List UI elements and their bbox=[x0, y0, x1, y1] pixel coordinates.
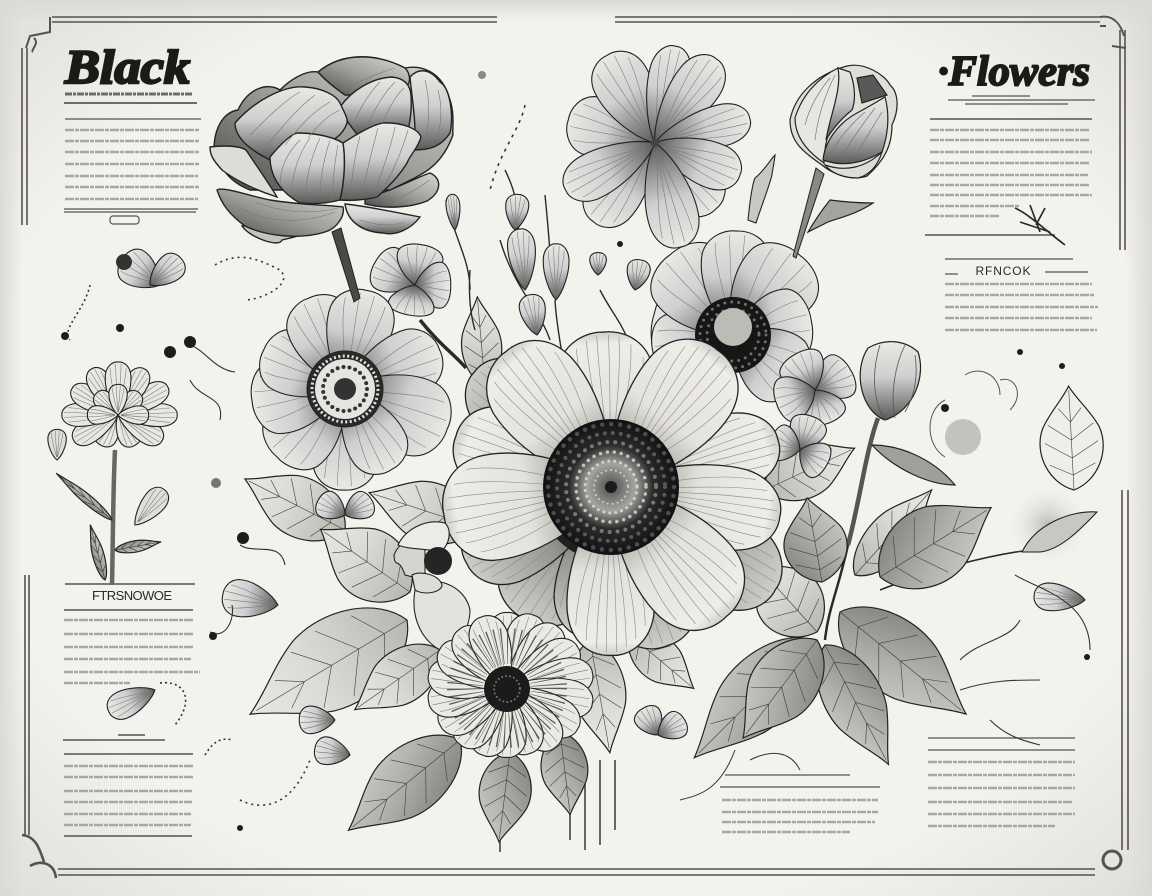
bottom hanging leaf 1 bbox=[473, 749, 536, 845]
tulip left petal bbox=[795, 68, 840, 163]
seed head bbox=[543, 419, 679, 555]
right column: secondary text block bbox=[945, 259, 1098, 330]
back petals bbox=[447, 340, 800, 661]
flower: anemone left bbox=[247, 283, 462, 490]
tulip middle petal bbox=[826, 68, 854, 140]
corner ornament: bottom right bbox=[1103, 851, 1121, 869]
small bloom big lower petal bbox=[414, 581, 470, 652]
bud: left middle bbox=[220, 577, 281, 623]
round seed sketch bbox=[945, 419, 981, 455]
bottom hanging leaf 2 bbox=[537, 729, 593, 817]
flower: upper right daisy bbox=[638, 229, 832, 412]
bud: pod on text bbox=[103, 677, 161, 724]
tulip curl bbox=[825, 152, 882, 178]
peony upper right petal bbox=[340, 77, 411, 134]
flower: main central bloom bbox=[435, 320, 800, 661]
text lines bbox=[64, 766, 193, 825]
bud: stray top centre bbox=[504, 193, 530, 231]
dotted flight paths and doodles bbox=[68, 105, 1090, 805]
peony front left petal bbox=[270, 133, 344, 204]
peony lower petal sliver bbox=[242, 220, 330, 243]
middle pale leaf bbox=[360, 464, 487, 556]
cluster leaf right bbox=[817, 584, 989, 743]
small caption box bbox=[110, 216, 139, 224]
tulip dark throat bbox=[857, 75, 887, 103]
cluster pale up-left bbox=[730, 540, 842, 654]
bud: white flowers bbox=[631, 702, 670, 742]
peony veins bbox=[240, 68, 441, 225]
left lower pale leaf bbox=[340, 628, 455, 731]
small bloom lower petal bbox=[412, 573, 442, 593]
peony front right petal bbox=[340, 123, 421, 200]
peony back mass bbox=[214, 57, 453, 190]
bud: left top bbox=[112, 243, 171, 300]
peony lower-left outer petal bbox=[210, 146, 277, 197]
leaf behind flower bbox=[457, 295, 505, 387]
pale back foliage bbox=[227, 295, 948, 757]
dark foliage bbox=[328, 475, 1011, 856]
peony right side petal bbox=[410, 71, 452, 150]
rules bbox=[928, 738, 1075, 750]
flower: top right tulip bbox=[790, 65, 897, 232]
gap shadow bbox=[536, 412, 686, 562]
peony lower wide left petal bbox=[217, 189, 343, 236]
small dots and insects bbox=[61, 71, 1090, 831]
peony right flat petal bbox=[365, 173, 439, 207]
right column: title block bbox=[925, 49, 1095, 245]
bottom long leaf bbox=[328, 714, 481, 856]
body text lines bbox=[930, 130, 1092, 216]
stems bbox=[112, 170, 1030, 852]
left column: title block bbox=[64, 41, 201, 224]
flower: top centre bbox=[555, 42, 755, 253]
text lines bbox=[64, 620, 200, 683]
centre hanging leaf bbox=[564, 635, 636, 757]
flower: peony top left bbox=[210, 57, 453, 243]
corner ornament: top left bbox=[26, 17, 50, 52]
rules bbox=[925, 119, 1092, 235]
right pod bbox=[1022, 512, 1097, 552]
stem: peony bbox=[332, 228, 360, 302]
peony upper left petal bbox=[235, 87, 347, 160]
bud side leaf bbox=[872, 445, 955, 485]
small bloom centre bbox=[424, 547, 452, 575]
cluster leaf down-left B bbox=[717, 620, 844, 758]
flower eye bbox=[651, 139, 659, 147]
rules bbox=[63, 735, 193, 836]
lower leaves bbox=[53, 470, 115, 524]
title: Flowers: ·Flowers bbox=[938, 49, 1090, 95]
bottom centre text block bbox=[720, 775, 880, 832]
tulip leaf bbox=[808, 200, 873, 232]
tulip veins bbox=[805, 75, 882, 162]
left column: bottom text block bbox=[63, 735, 193, 836]
peony upper back petal bbox=[318, 57, 410, 95]
mid-left pale leaf bbox=[301, 501, 430, 621]
corner ornament: top right bbox=[1100, 17, 1126, 48]
rules bbox=[64, 584, 195, 610]
tulip outline mass bbox=[790, 65, 897, 178]
daisy seed head bbox=[695, 297, 771, 373]
rules bbox=[64, 119, 201, 212]
rules bbox=[720, 775, 880, 787]
title rule bbox=[64, 102, 197, 104]
cluster leaf up bbox=[776, 493, 853, 587]
flower: right tulip bud bbox=[860, 342, 955, 485]
peony lower right petal bbox=[345, 204, 420, 234]
bottom right text block bbox=[928, 738, 1075, 826]
corner ornament: bottom left bbox=[22, 835, 56, 878]
heading: FTRSNOWOE bbox=[92, 588, 172, 603]
stem: top right tulip bbox=[793, 168, 824, 258]
anemone centre bbox=[307, 351, 383, 427]
left upper pale leaf bbox=[231, 452, 359, 557]
right upper back leaf bbox=[839, 476, 948, 589]
veined leaf bbox=[1037, 384, 1106, 492]
text lines bbox=[928, 762, 1075, 826]
sprig doodle bbox=[1015, 205, 1065, 245]
cluster leaf down bbox=[799, 631, 914, 778]
small bloom upper petals bbox=[398, 522, 449, 552]
flower: small back blooms bbox=[364, 241, 862, 481]
body text lines bbox=[65, 130, 200, 199]
small buds and sprigs bbox=[103, 193, 1086, 768]
left column: lower text block bbox=[64, 584, 200, 683]
tulip right front petal bbox=[823, 97, 888, 164]
bud: right pod bbox=[1033, 582, 1086, 614]
falling petal bbox=[748, 155, 775, 223]
cluster leaf down-left A bbox=[670, 615, 837, 782]
right pale leaf bbox=[754, 424, 866, 514]
title: Black: Black bbox=[64, 41, 190, 94]
right side leaf and stippling bbox=[930, 371, 1106, 567]
left big pale leaf bbox=[227, 582, 430, 753]
front petals bbox=[435, 320, 789, 655]
gerbera centre bbox=[484, 666, 530, 712]
flower: gerbera bbox=[425, 609, 596, 762]
small bloom left petal bbox=[394, 543, 425, 580]
title rules bbox=[948, 96, 1095, 104]
heading: RFNCOK bbox=[976, 264, 1030, 278]
heading rules bbox=[945, 259, 1088, 274]
text lines bbox=[945, 284, 1098, 330]
right leaf large bbox=[860, 475, 1011, 609]
gerbera radial lines bbox=[465, 646, 549, 730]
subtitle squiggle line bbox=[65, 92, 193, 96]
text lines bbox=[722, 800, 878, 832]
bud: lower stem bbox=[299, 706, 335, 734]
plant: left pom-pom flower bbox=[48, 362, 177, 581]
stippled shadow bbox=[1006, 483, 1090, 567]
flower: small middle bloom bbox=[394, 522, 470, 652]
centre right leaf bbox=[616, 618, 708, 705]
